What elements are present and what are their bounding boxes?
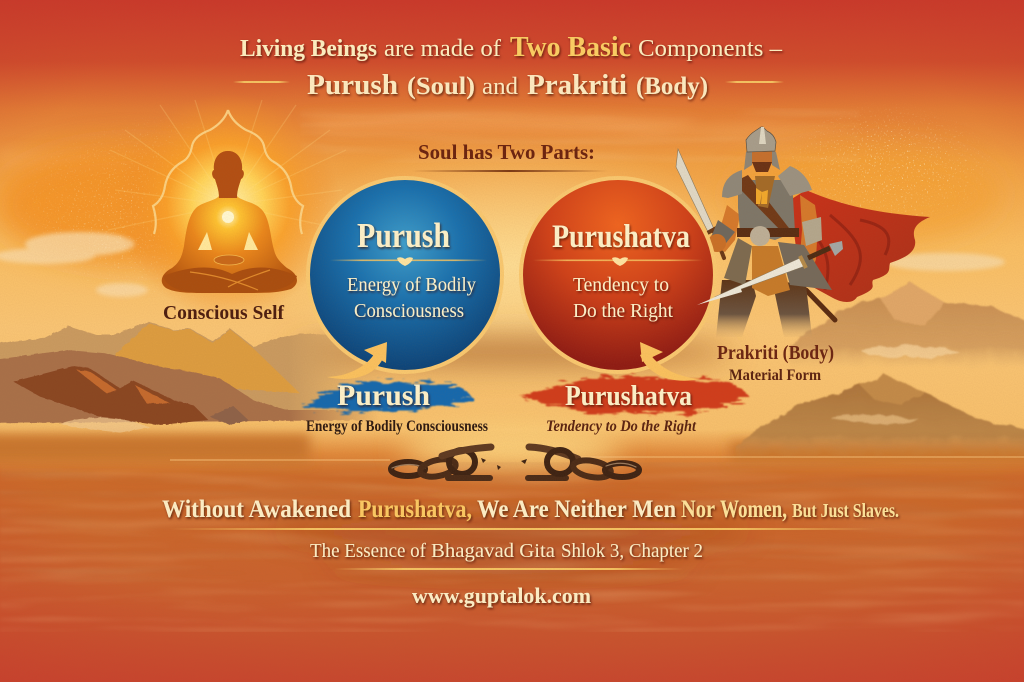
mountains left [0,322,387,433]
label: material form: Material Form [729,367,822,384]
left chain [391,447,491,480]
face [752,150,772,172]
upper sword [676,149,714,232]
text: energy of bodily consciousness [347,274,476,322]
brush stroke: blue [302,381,474,412]
legs [716,280,756,337]
title line one: Living Beings [240,36,377,62]
clouds left [0,232,148,297]
crossed legs [163,267,297,293]
title line one: Components – [638,36,783,62]
title side rules [233,81,784,83]
source line: Bhagavad Gita [431,540,555,562]
heart light [222,211,234,223]
scabbard [806,290,835,320]
main message: Women, [720,496,787,523]
label: purushatva [546,380,697,435]
sparkle field left [16,120,336,294]
source line: Shlok 3, Chapter 2 [561,540,703,562]
heading: purush: Purush [357,216,450,255]
figure silhouette [162,151,297,293]
main message: But Just Slaves. [792,500,899,522]
main message [162,496,899,523]
mountains right [735,282,1024,456]
right chain [528,447,639,480]
arms [706,205,740,252]
subheading: soul has two parts: Soul has Two Parts: [418,140,595,164]
title line one: are made of [384,36,501,62]
streaks [0,462,1024,632]
text: tendency to do the right: Do the Right [573,300,673,322]
rule under source line [334,568,683,570]
title line one: Two Basic [510,31,631,63]
clouds right [885,253,1005,271]
caption: tendency to do the right: Tendency to Do the Right [546,418,697,435]
title [240,31,783,101]
chain fragments [481,458,527,470]
text: tendency to do the right: Tendency to [573,274,669,296]
light rays [108,100,346,230]
halo arch [153,110,303,234]
label: prakriti body: Prakriti (Body) [717,342,834,364]
lower sword [697,258,805,305]
panel: purush blue circle [308,178,502,372]
caption: energy of bodily consciousness: Energy of Bodily Consciousness [306,418,488,435]
website: www.guptalok.com [412,583,591,608]
label: purush [306,379,488,435]
text: tendency to do the right [573,274,673,322]
panel: purushatva red circle [521,178,715,372]
helmet [746,127,776,152]
torso armour [738,180,795,240]
label: purushatva: Purushatva [565,380,692,412]
pauldrons [722,170,742,198]
title line two: and [482,74,518,100]
text: energy of bodily consciousness: Energy of Bodily [347,274,476,296]
head shading [212,151,244,198]
label: conscious self: Conscious Self [163,302,284,324]
title line one [240,31,783,63]
sword tip over red circle [697,286,742,305]
main message: Nor [681,496,715,523]
title line two: (Soul) [407,73,475,100]
arm gaps [198,232,258,250]
label: purush: Purush [337,379,430,412]
main message: We Are Neither Men [477,496,676,523]
title line two: Prakriti [527,69,627,101]
belt and skirt [737,228,799,237]
icon: broken chain [391,447,639,480]
main message: Purushatva, [358,496,472,523]
main message: Without Awakened [162,496,351,523]
title line two [307,69,708,101]
icon: meditating figure, conscious self [108,93,346,317]
title line two: Purush [307,69,398,101]
divider with heart [330,257,487,266]
sparkle field right [780,108,992,222]
text: energy of bodily consciousness: Consciousness [354,300,464,322]
arrow: red circle [640,342,700,381]
source line [310,540,703,562]
hands [214,255,244,265]
title line two: (Body) [636,73,708,100]
divider with heart [533,257,703,266]
arrow: blue circle [327,342,387,379]
label: prakriti body [717,342,834,384]
heading: purushatva: Purushatva [552,219,690,255]
rule under message [169,528,877,530]
brush stroke: red [522,376,748,414]
icon: warrior, prakriti [676,127,930,337]
cape [790,190,930,302]
source line: The Essence of [310,540,426,562]
